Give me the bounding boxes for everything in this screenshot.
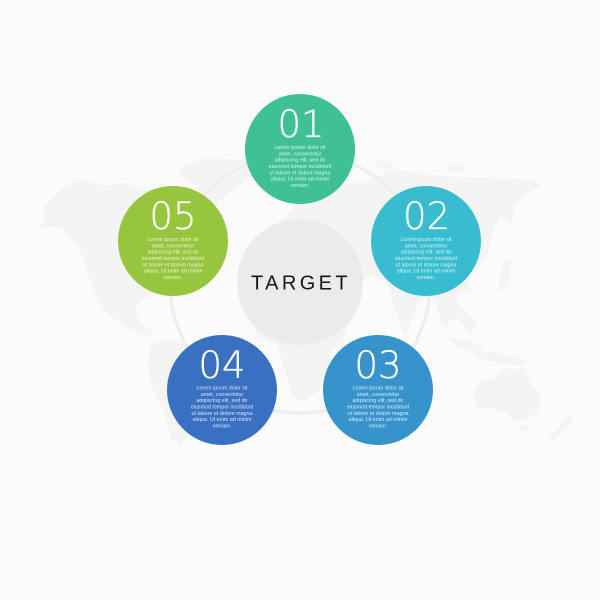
- step 05: adipiscing elit, sed do: [147, 250, 199, 256]
- step 04: amet, consectetur: [201, 392, 243, 398]
- step 01: 01: [277, 103, 325, 146]
- step 04: ut labore et dolore magna: [192, 411, 252, 417]
- step 02: 02: [403, 195, 450, 238]
- step 03: aliqua. Ut enim ad minim: [349, 417, 408, 423]
- step 03: amet, consectetur: [357, 392, 399, 398]
- step 03: veniam.: [369, 424, 387, 430]
- world map: [33, 158, 574, 447]
- step 01: eiusmod tempor incididunt: [269, 164, 332, 170]
- target label: TARGET: [251, 272, 351, 294]
- step 04: eiusmod tempor incididunt: [191, 404, 254, 410]
- step 04: veniam.: [213, 424, 231, 430]
- step 01: amet, consectetur: [279, 151, 321, 157]
- step 05: veniam.: [164, 275, 182, 281]
- step 02: veniam.: [417, 275, 435, 281]
- step 03: Lorem ipsum dolor sit: [352, 386, 404, 392]
- step 02: ut labore et dolore magna: [396, 262, 456, 268]
- step 01: aliqua. Ut enim ad minim: [271, 177, 330, 183]
- step 05: ut labore et dolore magna: [143, 262, 203, 268]
- center circle: target: [237, 219, 363, 345]
- step 05: eiusmod tempor incididunt: [142, 256, 205, 262]
- step 05: [118, 186, 228, 296]
- step 02: Lorem ipsum dolor sit: [400, 237, 452, 243]
- step 04: 04: [198, 344, 246, 387]
- step 04: aliqua. Ut enim ad minim: [193, 417, 252, 423]
- step 01: [245, 94, 355, 204]
- step 04: [167, 335, 277, 445]
- step 02: adipiscing elit, sed do: [400, 250, 452, 256]
- step 02: [371, 186, 481, 296]
- step 05: amet, consectetur: [152, 243, 194, 249]
- step 01: ut labore et dolore magna: [270, 170, 330, 176]
- step 01: Lorem ipsum dolor sit: [274, 145, 326, 151]
- step 03: 03: [354, 344, 402, 387]
- step 01: veniam.: [291, 183, 309, 189]
- step 03: adipiscing elit, sed do: [352, 398, 404, 404]
- step 01: adipiscing elit, sed do: [274, 158, 326, 164]
- step 05: aliqua. Ut enim ad minim: [144, 269, 203, 275]
- step 04: Lorem ipsum dolor sit: [196, 386, 248, 392]
- step 03: eiusmod tempor incididunt: [347, 404, 410, 410]
- step 02: eiusmod tempor incididunt: [395, 256, 458, 262]
- step 04: adipiscing elit, sed do: [196, 398, 248, 404]
- connecting ring: [170, 153, 430, 413]
- step 03: [323, 335, 433, 445]
- step 02: amet, consectetur: [405, 243, 447, 249]
- step 05: Lorem ipsum dolor sit: [147, 237, 199, 243]
- step 02: aliqua. Ut enim ad minim: [397, 269, 456, 275]
- step 05: 05: [150, 195, 196, 238]
- step 03: ut labore et dolore magna: [348, 411, 408, 417]
